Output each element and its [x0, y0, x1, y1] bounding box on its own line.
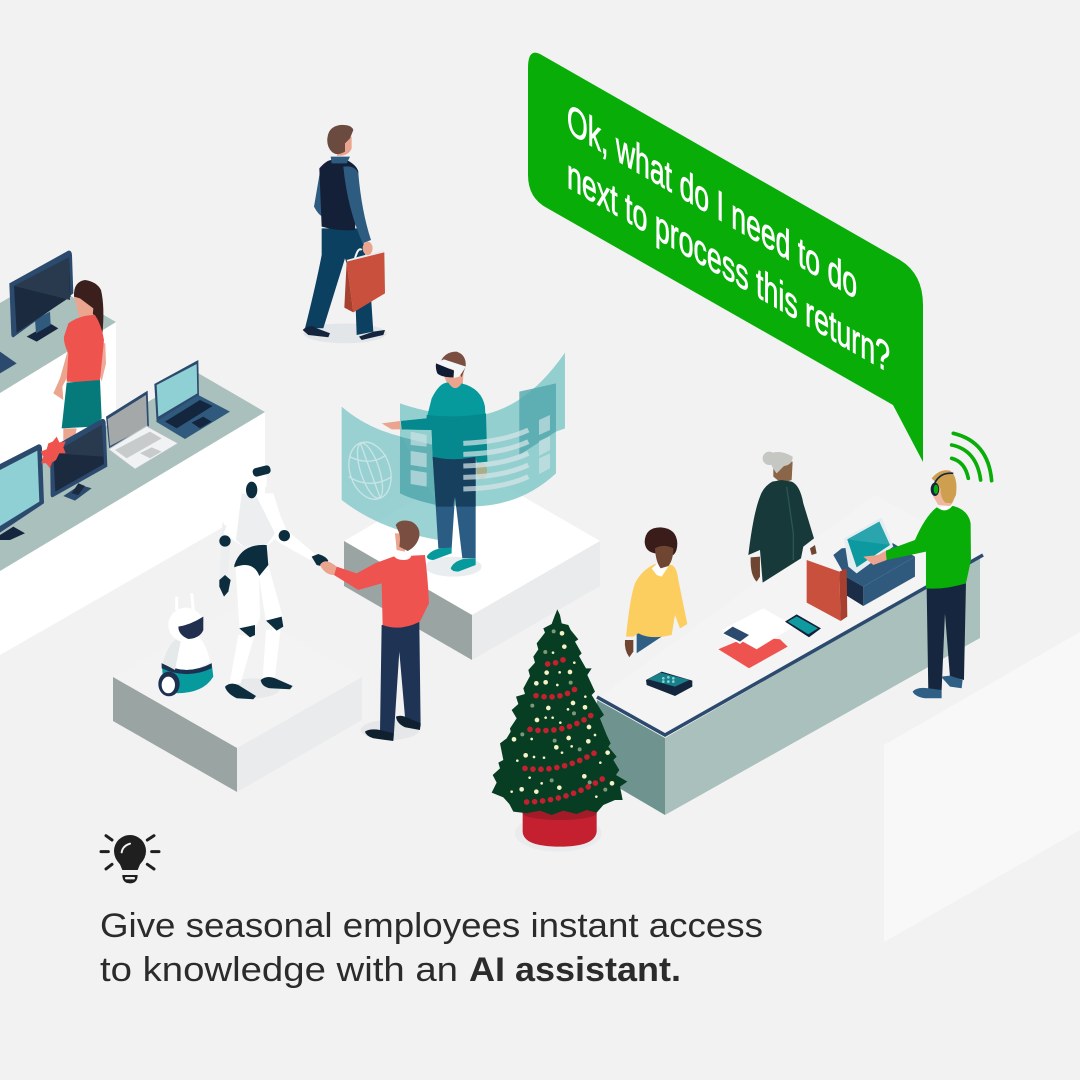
holographic text lines [463, 430, 528, 489]
employee in green with headset [863, 470, 971, 698]
caption: to knowledge with an [100, 951, 458, 989]
lower monitors and laptops [0, 360, 230, 540]
shopping bag [807, 556, 847, 621]
christmas tree [492, 609, 627, 852]
upper left display counter [0, 279, 116, 500]
walking shopper with bag [303, 125, 387, 343]
smartphone [785, 614, 821, 637]
sale badge [41, 437, 66, 468]
speech bubble [528, 53, 923, 462]
speech bubble text: Ok, what do I need to do [567, 94, 857, 309]
holographic panels [342, 353, 565, 540]
VR shopper [382, 352, 487, 577]
lower left display counter [0, 373, 265, 655]
monitor with light screen [0, 444, 44, 540]
humanoid robot [219, 465, 328, 699]
register [833, 517, 915, 606]
payment terminal [646, 672, 692, 696]
silver laptop [106, 391, 178, 469]
robot platform [113, 606, 362, 792]
papers and cards [718, 608, 794, 668]
icon: light bulb [101, 835, 159, 883]
tree lights [510, 631, 614, 798]
older customer in dark coat [748, 452, 817, 583]
caption [100, 907, 763, 989]
bottom right pale platform [884, 632, 1080, 942]
speech bubble text: next to process this return? [567, 149, 890, 383]
woman shopper [53, 280, 106, 440]
caption: Give seasonal employees instant access [100, 907, 763, 945]
holographic VR display and shopper [342, 352, 565, 577]
man in red sweater [320, 521, 429, 741]
small wheeled robot [158, 593, 213, 696]
signal arcs [952, 433, 992, 481]
monitor with sale badge [50, 419, 107, 501]
upper monitor [0, 251, 73, 373]
blue laptop [154, 360, 230, 439]
checkout scene [625, 433, 992, 698]
globe icon [342, 437, 398, 505]
caption: AI assistant. [469, 951, 681, 989]
checkout counter [597, 495, 983, 815]
cashier in yellow [625, 527, 687, 657]
VR platform [344, 467, 600, 660]
garlands [525, 656, 603, 802]
